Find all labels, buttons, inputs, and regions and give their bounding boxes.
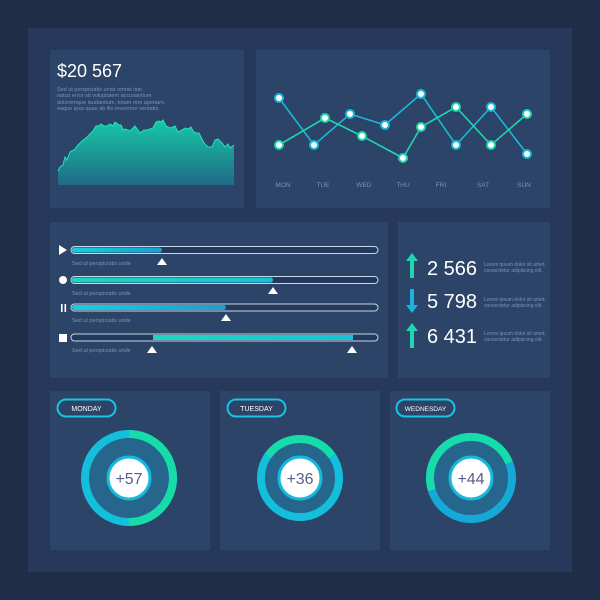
bar row 4: Sed ut perspiciatis unde (72, 348, 131, 354)
stat 3 up (406, 323, 546, 348)
heading: amount: $20 567 (57, 61, 122, 81)
bar row 1: Sed ut perspiciatis unde (72, 261, 131, 267)
panel: stats (398, 222, 550, 378)
stat 2 down: 5 798 (427, 291, 477, 313)
line series green (275, 103, 531, 162)
stat 3 up: 6 431 (427, 326, 477, 348)
x axis labels: TUE (316, 182, 330, 189)
panel: weekly line chart (256, 50, 550, 208)
x axis labels: FRI (436, 182, 446, 189)
bar row 2 (59, 276, 378, 297)
line series blue (275, 90, 531, 158)
x axis labels: SUN (517, 182, 531, 189)
donut (246, 424, 354, 532)
badge: WEDNESDAY (405, 406, 447, 413)
donut: +57 (115, 471, 143, 488)
panel: monday (50, 391, 210, 550)
bar row 3 (61, 304, 378, 324)
stat 2 down: Lorem ipsum dolor sit amet, (484, 297, 546, 303)
stat 2 down: consectetur adipiscing elit. (484, 303, 543, 309)
area chart (58, 119, 234, 185)
text block: eaque ipsa quae ab illo inventore veritatis. (57, 106, 160, 112)
panel: revenue area chart (50, 50, 244, 208)
badge (228, 400, 286, 416)
text block: doloremque laudantium, totam rem aperiam, (57, 100, 165, 106)
x axis labels: THU (396, 182, 410, 189)
bar row 2: Sed ut perspiciatis unde (72, 291, 131, 297)
x axis labels (275, 182, 531, 189)
stat 1 up: Lorem ipsum dolor sit amet, (484, 262, 546, 268)
panel: tuesday (220, 391, 380, 550)
x axis labels: WED (356, 182, 372, 189)
donut (85, 434, 173, 522)
donut: +44 (457, 471, 485, 488)
bar row 3: Sed ut perspiciatis unde (72, 318, 131, 324)
panel: progress bars (50, 222, 388, 378)
stat 1 up: consectetur adipiscing elit. (484, 268, 543, 274)
text block: natus error sit voluptatem accusantium (57, 93, 151, 99)
x axis labels: SAT (477, 182, 489, 189)
bar row 4 (59, 334, 378, 354)
donut: +36 (286, 471, 314, 488)
badge (58, 400, 116, 416)
badge (396, 400, 454, 416)
text block: Sed ut perspiciatis unde omnis iste (57, 87, 142, 93)
x axis labels: MON (275, 182, 291, 189)
stat 3 up: consectetur adipiscing elit. (484, 337, 543, 343)
donut (420, 427, 522, 529)
text block (57, 87, 165, 112)
stat 1 up (406, 253, 546, 280)
stat 1 up: 2 566 (427, 258, 477, 280)
stat 2 down (406, 289, 546, 313)
stat 3 up: Lorem ipsum dolor sit amet, (484, 331, 546, 337)
badge: MONDAY (71, 406, 102, 413)
badge: TUESDAY (240, 406, 273, 413)
bar row 1 (59, 245, 378, 267)
panel: wednesday (390, 391, 550, 550)
